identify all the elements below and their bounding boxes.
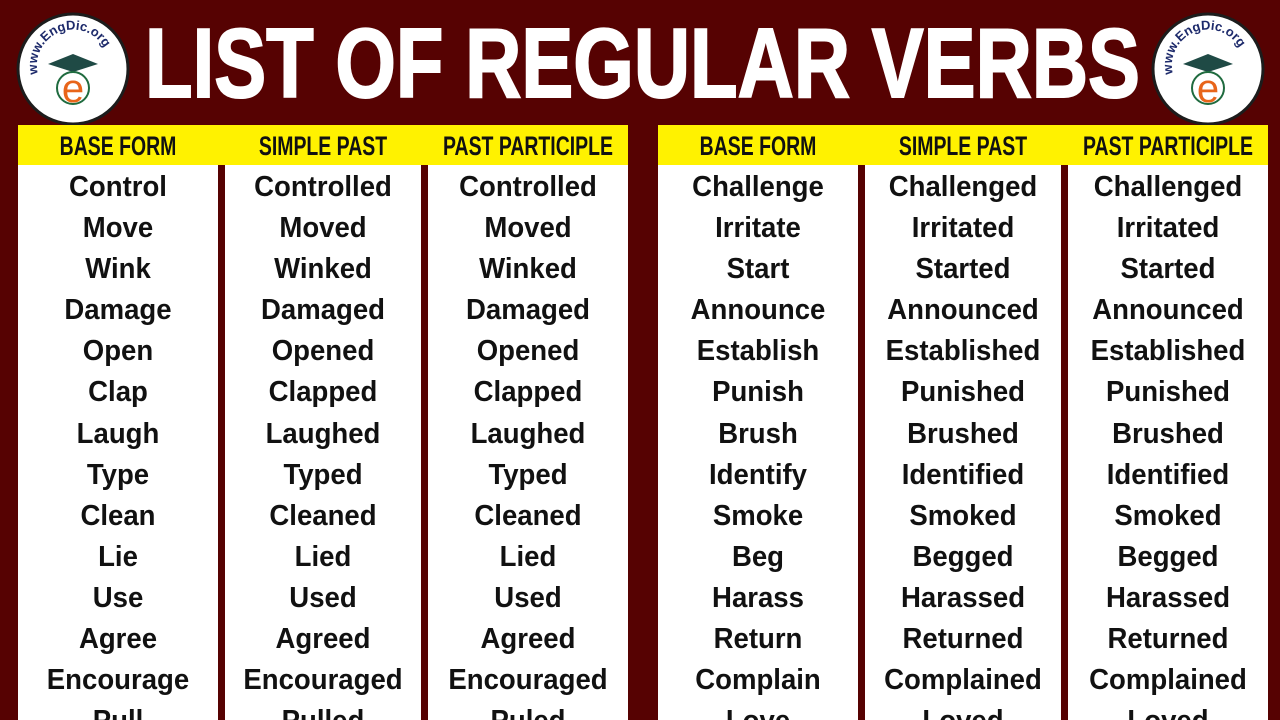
- column: base form: Return: [714, 623, 802, 655]
- column: base form: Agree: [79, 623, 157, 655]
- column: simple past: Established: [886, 335, 1040, 367]
- column: simple past: Harassed: [901, 582, 1025, 614]
- logo right: e: [1197, 67, 1219, 111]
- column: simple past: Cleaned: [269, 500, 377, 532]
- column: base form: [658, 165, 858, 720]
- header row left: BASE FORM: [60, 131, 176, 161]
- column: past participle: Challenged: [1094, 171, 1242, 203]
- column: base form: Irritate: [715, 212, 801, 244]
- column: simple past: Punished: [901, 376, 1025, 408]
- column: simple past: Clapped: [269, 376, 377, 408]
- column: past participle: Punished: [1106, 376, 1230, 408]
- column: base form: Brush: [718, 418, 798, 450]
- column: base form: Wink: [85, 253, 151, 285]
- column: simple past: Agreed: [276, 623, 370, 655]
- column: base form: [18, 165, 218, 720]
- column: simple past: Smoked: [909, 500, 1017, 532]
- column: simple past: Brushed: [907, 418, 1019, 450]
- column: base form: Open: [83, 335, 153, 367]
- column: past participle: Cleaned: [474, 500, 582, 532]
- column: simple past: Started: [916, 253, 1010, 285]
- column: base form: Harass: [712, 582, 804, 614]
- header row right: BASE FORM: [700, 131, 816, 161]
- column: simple past: Complained: [884, 664, 1042, 696]
- column: simple past: Announced: [887, 294, 1039, 326]
- column: simple past: Controlled: [254, 171, 392, 203]
- column: past participle: Announced: [1092, 294, 1244, 326]
- column: base form: Punish: [712, 376, 804, 408]
- table left: [18, 125, 628, 720]
- logo left: www.EngDic.org: [30, 20, 110, 75]
- column: base form: Move: [83, 212, 153, 244]
- column: simple past: Begged: [912, 541, 1014, 573]
- column: base form: Use: [93, 582, 143, 614]
- column: past participle: Established: [1091, 335, 1245, 367]
- column: base form: Lie: [98, 541, 138, 573]
- column: simple past: Irritated: [912, 212, 1014, 244]
- logo right: [1152, 12, 1264, 125]
- header row left: [18, 125, 628, 165]
- column: past participle: Started: [1121, 253, 1215, 285]
- column: past participle: [1068, 165, 1268, 720]
- column: base form: Establish: [697, 335, 819, 367]
- column: base form: Identify: [709, 459, 807, 491]
- header row left: PAST PARTICIPLE: [443, 131, 613, 161]
- column: past participle: Agreed: [481, 623, 575, 655]
- column: past participle: Clapped: [474, 376, 582, 408]
- column: base form: Control: [69, 171, 167, 203]
- column: past participle: Encouraged: [448, 664, 608, 696]
- column: base form: Clean: [80, 500, 156, 532]
- column: simple past: Winked: [274, 253, 372, 285]
- column: past participle: Returned: [1108, 623, 1228, 655]
- column: past participle: [428, 165, 628, 720]
- column: simple past: Moved: [279, 212, 367, 244]
- column: base form: Damage: [64, 294, 172, 326]
- column: past participle: Used: [494, 582, 562, 614]
- column: simple past: Opened: [272, 335, 374, 367]
- column: simple past: Challenged: [889, 171, 1037, 203]
- column: simple past: Lied: [295, 541, 351, 573]
- column: base form: Encourage: [47, 664, 189, 696]
- header row left: SIMPLE PAST: [259, 131, 387, 161]
- column: past participle: Complained: [1089, 664, 1247, 696]
- column: past participle: Controlled: [459, 171, 597, 203]
- header row right: SIMPLE PAST: [899, 131, 1027, 161]
- column: past participle: Laughed: [471, 418, 585, 450]
- column: simple past: [225, 165, 421, 720]
- logo left: e: [62, 67, 84, 111]
- header row right: PAST PARTICIPLE: [1083, 131, 1253, 161]
- column: past participle: Typed: [488, 459, 568, 491]
- column: base form: Beg: [732, 541, 784, 573]
- column: past participle: Winked: [479, 253, 577, 285]
- column: simple past: Typed: [283, 459, 363, 491]
- column: simple past: Returned: [903, 623, 1023, 655]
- column: past participle: Harassed: [1106, 582, 1230, 614]
- logo left: [16, 12, 130, 125]
- column: past participle: Identified: [1107, 459, 1229, 491]
- column: past participle: Brushed: [1112, 418, 1224, 450]
- column: past participle: Irritated: [1117, 212, 1219, 244]
- column: base form: Laugh: [77, 418, 159, 450]
- column: base form: Clap: [88, 376, 148, 408]
- column: simple past: Used: [289, 582, 357, 614]
- column: base form: Announce: [691, 294, 825, 326]
- column: simple past: [865, 165, 1061, 720]
- header row right: [658, 125, 1268, 165]
- column: past participle: Moved: [484, 212, 572, 244]
- column: simple past: Encouraged: [243, 664, 403, 696]
- column: base form: Challenge: [692, 171, 824, 203]
- column: past participle: Damaged: [466, 294, 590, 326]
- column: base form: Start: [727, 253, 789, 285]
- column: simple past: Damaged: [261, 294, 385, 326]
- column: past participle: Lied: [500, 541, 556, 573]
- column: simple past: Laughed: [266, 418, 380, 450]
- column: simple past: Identified: [902, 459, 1024, 491]
- table right: [658, 125, 1268, 720]
- column: base form: Type: [87, 459, 149, 491]
- column: past participle: Smoked: [1114, 500, 1222, 532]
- column: past participle: Begged: [1117, 541, 1219, 573]
- column: past participle: Opened: [477, 335, 579, 367]
- column: base form: Smoke: [713, 500, 803, 532]
- logo right: www.EngDic.org: [1164, 20, 1244, 75]
- column: base form: Complain: [695, 664, 821, 696]
